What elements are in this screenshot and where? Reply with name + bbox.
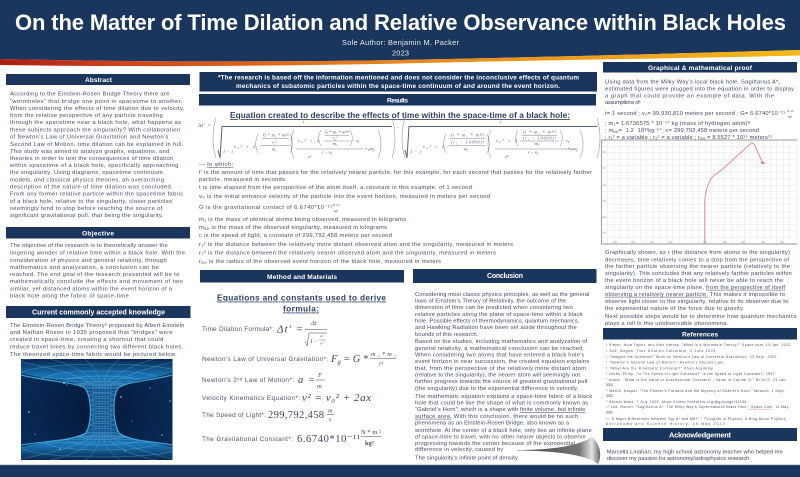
equation definitions [199, 162, 592, 265]
constant: speed of light: 299,792,458 [268, 410, 324, 421]
proof discussion: observe light closer to the singularity, relative to its observer due to [605, 299, 788, 305]
equation: time dilation: c² [320, 340, 324, 346]
main equation: (r₁ − 10000)² [523, 136, 557, 140]
equation: second law [202, 372, 325, 390]
equation definitions: is the mass of the observed singularity, measured in kilograms [210, 225, 387, 231]
equation: universal gravitation: F [331, 354, 337, 365]
abstract text: theories in order to test the consequences of time dilation [10, 156, 173, 162]
equation definitions: kg² [334, 209, 338, 213]
acknowledgement text: Marcella Linahan, my high school astronomy teacher who helped me [607, 450, 783, 456]
conclusion text: wormhole. At the center of a black hole, only lies an infinite plane [414, 428, 592, 434]
proof discussion: the farther particle observing the nearer particle (relatively to the [605, 264, 790, 270]
main equation: m₁ [535, 141, 540, 146]
equation: kinematics: Velocity Kinematics Equation*: [202, 395, 300, 402]
abstract text: description of the nature of time dilation was concluded. [10, 184, 173, 190]
author: Sole Author: Benjamin M. Packer [342, 38, 460, 47]
conclusion text: hole. Possible effects of thermodynamics, quantum mechanics, [415, 318, 580, 324]
conclusion text: laws of Einstein’s Theory of Relativity, the outcome of the [415, 298, 566, 304]
abstract text: of Newton’s Law of Universal Gravitation and Newton’s [10, 134, 168, 140]
conclusion text: The mathematic equation explains a space-time fabric of a black [415, 394, 592, 400]
proof introduction: estimated figures were plugged into the equation in order to display [605, 86, 794, 92]
assumptions [605, 109, 794, 141]
objective text [10, 243, 185, 300]
conclusion text: The singularity’s infinite point of density. [415, 456, 519, 462]
abstract text: This study was aimed to analyze graphs, equations, and [10, 149, 169, 155]
assumptions: = 8.5527 * 10¹⁶ meters¹¹ [705, 134, 772, 141]
abstract text: When considering the effects of time dilation due to velocity, [10, 106, 185, 112]
abstract text: through the spacetime near a black hole, what happens as [10, 120, 181, 126]
equation definitions: is the radius of the observed event horizon of the black hole, measured in meters [207, 259, 441, 265]
equation: time dilation: v² [320, 334, 324, 338]
equation: time dilation: Time Dilation Formula*: [202, 326, 274, 333]
conclusion text: event horizon in near succession, the created equation explains [415, 359, 589, 365]
constant: gravitational: kg² [365, 440, 374, 447]
abstract text: Second Law of Motion, time dilation can be explained in full. [10, 142, 184, 148]
proof discussion: Graphically shown, as r (the distance from atoms to the singularity) [605, 250, 790, 256]
panel: conclusion: Conclusion [487, 273, 523, 280]
reference list: 2022. [606, 410, 613, 414]
conclusion text: of space-time to travel, with no other nearer objects to observe [415, 434, 586, 440]
assumptions: kg² [788, 114, 792, 118]
constant: gravitational: 6.6740*10⁻¹¹ [297, 434, 360, 445]
abstract text: From any former relative particle within the spacetime fabric [10, 192, 183, 198]
proof discussion [605, 250, 797, 327]
objective text: reached. The end goal of the research presented will be to [10, 272, 179, 278]
abstract text: According to the Einstein-Rosen Bridge Theory there are [10, 92, 169, 98]
panel: objective [6, 227, 190, 300]
main equation: − v₀ [352, 138, 360, 143]
objective text: lingering wonder of relative time within a black hole. With the [10, 250, 185, 256]
equation definitions: G is the gravitational contact of 6.6740*10⁻¹¹ [199, 205, 332, 211]
conclusion text: (relative to the singularity), the nearer atom will seemingly not [415, 372, 580, 378]
reference list: ⁸ Martin, Kaspar. “The Painter’s Paradox and the Mystery of Gabriel’s Horn.” Medium, 1 Sept. [606, 389, 785, 393]
equation definitions: m₁ is the mass of identical atoms being observed, measured in kilograms [199, 217, 406, 223]
main equation: c² [308, 154, 312, 159]
main equation: * rᴮᴴ) [568, 147, 578, 152]
abstract text [9, 92, 185, 219]
main equation: c − v₀ [322, 150, 333, 154]
main equation: c² [505, 154, 509, 159]
equation: second law: m [317, 383, 322, 390]
main equation: v₀² + 2 [298, 138, 319, 143]
main equation: v₀² + 2 [234, 144, 255, 149]
equation definitions: N·m² [333, 203, 340, 207]
conclusion text [414, 292, 592, 462]
wormhole illustration [20, 359, 172, 460]
equation definitions: r₂² is the distance between the relatively nearer observed atom and the singularity, measured in meters [199, 250, 496, 256]
equation: universal gravitation [202, 351, 396, 368]
panel: references [603, 328, 797, 426]
panel: graphical and mathematical proof: Graphical & mathematical proof [648, 65, 753, 72]
conclusion text: When considering two atoms that have entered a black hole’s [415, 352, 584, 358]
proof discussion: Next possible steps would be to determine how quantum mechanics [605, 314, 797, 320]
constant: speed of light: The Speed of Light*: [202, 412, 266, 419]
conclusion text: (the singularity) due to the exponential difference in velocity. [415, 386, 579, 392]
main equation: m₁ [464, 146, 469, 152]
callout: research note: mechanics of subatomic particles within the space-time continuum of and around the event horizon. [236, 83, 560, 90]
equation definitions: BH [204, 227, 210, 231]
abstract text: significant gravitational pull, that being the singularity. [10, 213, 164, 219]
equation: time dilation: Δt [310, 320, 317, 327]
line chart [602, 140, 798, 244]
proof introduction: assumptions of: [605, 100, 641, 106]
equation: kinematics [202, 392, 371, 404]
equation definitions: t′ is the amount of time that passes for the relatively nearer particle, for this example, for each second that passes for the relatively farther [199, 170, 592, 176]
constant: gravitational: The Gravitational Constant*: [202, 436, 293, 443]
abstract text: of a black hole, relative to the singularity, closer particles [10, 199, 172, 205]
equations heading [217, 292, 386, 314]
main equation: m₁ [272, 146, 277, 152]
knowledge text: The Einstein-Rosen Bridge Theory² proposed by Albert Einstein [10, 323, 184, 329]
equation: universal gravitation: r² [379, 362, 383, 368]
conclusion text: Based on the studies, including mathematics and analyzation of [415, 339, 588, 345]
panel: current knowledge: Current commonly accepted knowledge [32, 310, 165, 316]
equation: time dilation [202, 320, 327, 346]
constant: gravitational [202, 429, 381, 447]
reference list: ² Sok, Bogna. Time Dilation Calculator, 2 June 2023. [606, 349, 717, 353]
main equation: v₀² + 2 [423, 144, 444, 149]
main equation: 1 − ( [410, 149, 422, 154]
equation definitions: particle, measured in seconds [199, 177, 285, 183]
conclusion text: progressing towards the center because of the exponential [415, 441, 575, 447]
main equation: t [500, 119, 502, 124]
equation: universal gravitation: Newton’s Law of Universal Gravitation*: [202, 356, 328, 363]
proof discussion: observing a relatively nearer particle. This makes it impossible to [605, 292, 785, 298]
conclusion text: dimension of time can be predicted when considering two [415, 305, 573, 311]
equation definitions: — In which: [199, 162, 233, 168]
objective text: mathematically conclude the effects and movement of two [10, 279, 183, 285]
reference list: ¹ Simon, Nola Taylor, and Alex Harvey. “What Is a Wormhole Theory?” Space.com, 13 Jan. 2022. [606, 343, 792, 347]
equation: time dilation: 1− [310, 339, 317, 345]
equation definitions: r [199, 259, 201, 265]
knowledge text: and Nathan Rosen in 1935 proposed that “bridges” were [10, 330, 173, 336]
main equation: − v₀ [562, 138, 570, 143]
year: 2023 [392, 48, 409, 58]
abstract text: seemingly tend to stop before reaching the source of [10, 206, 163, 212]
constant: gravitational: N*m² [361, 429, 381, 436]
equation: universal gravitation: m₁*m₂ [371, 351, 396, 358]
knowledge text: created in space-time, creating a shortcut that could [10, 337, 163, 343]
reference list: ¹⁰ Lea, Robert. “Sagittarius A*: The Milky Way’s Supermassive Black Hole.” Space.Com, 11 May [606, 405, 789, 409]
proof discussion: decreases, time relatively comes to a stop from the perspective of [605, 258, 789, 264]
panel: conclusion [413, 269, 600, 464]
panel: abstract [6, 74, 190, 219]
equation definitions: r₁² is the distance between the relatively more distant observed atom and the singularity, measured in meters [199, 242, 513, 248]
abstract text: these subjects approach the singularity? With collaboration [10, 128, 180, 134]
proof discussion: singularity on the space-time plane, from the perspective of itself [605, 285, 785, 291]
icon: Gabriel's horn [517, 437, 600, 464]
main equation: G * m₁ * mᴮᴴ [325, 130, 350, 134]
conclusion text: surface area. With this conclusion, there would be no such [415, 414, 578, 420]
conclusion text: bounds of this research. [415, 332, 479, 338]
panel: objective: Objective [82, 230, 114, 237]
abstract text: the singularity. Using diagrams, spacetime continuum [10, 170, 163, 176]
panel: graphical and mathematical proof [602, 62, 798, 327]
equation: second law: Newton’s 2ⁿᵈ Law of Motion*: [202, 377, 294, 384]
equations heading: Equations and constants used to derive [217, 292, 386, 302]
proof introduction: Using data from the Milky Way’s local black hole, Sagittarius A*, [605, 80, 780, 86]
abstract text: from the relative perspective of any particle traveling [10, 113, 163, 119]
panel: method and materials [200, 270, 404, 447]
main equation [197, 118, 600, 159]
equation definitions: v₀ is the initial entrance velocity of the particle into the event horizon, measured in meters per second [199, 194, 490, 200]
reference list: ⁶ Gibbs, Philip. “Is The Speed of Light Constant?” Is the Speed of Light Constant?, 1997. [606, 372, 776, 376]
equation definitions: t is time elapsed from the perspective of the atom itself, a constant in this example, of 1 second [199, 185, 472, 191]
knowledge text: The theorized space-time fabric would be pictured below. [10, 352, 177, 358]
equations heading: formula: [283, 304, 319, 314]
conclusion text: that, from the perspective of the relatively more distant atom [415, 366, 586, 372]
main equation: v₀² + 2 [496, 138, 517, 143]
constant: speed of light: m [328, 408, 333, 414]
acknowledgement text [607, 450, 783, 462]
assumptions: BH [613, 130, 619, 134]
main equation: G * m₁ * mᴮᴴ [523, 130, 556, 134]
callout: research note [200, 72, 597, 92]
abstract text: within spacetime of a black hole, specifically approaching [9, 163, 178, 169]
panel: results: Results [387, 98, 408, 104]
conclusion text: Considering most classic physics principles, as well as the general [415, 292, 589, 298]
conclusion text: general relativity, a mathematical conclusion can be reached. [415, 346, 585, 352]
acknowledgement text: discover my passion for astronomy/astrophysics research [607, 456, 749, 462]
proof introduction: a graph that could provide an example of data. With the [605, 94, 774, 100]
assumptions: t= 1 second ; v₀= 99,930,819 meters per second ; G= 6.6740*10⁻¹¹ [605, 111, 785, 117]
assumptions: ; m₁= 1.6735575 * 10⁻²⁷ kg (mass of hydrogen atom)⁸ [605, 120, 751, 127]
conclusion text: “Gabriel’s Horn”, which is a shape with finite volume, but infinite [415, 407, 585, 413]
constant: speed of light [202, 408, 334, 423]
reference list: ⁷ Admin. “What Is the Value of Gravitational Constant? - Value of Capital G.” BYJU’S, 23 Jan. [606, 378, 787, 382]
equation definitions: c is the speed of light, a constant of 299,792,458 meters per second [199, 233, 392, 239]
objective text: consideration of physics and general relativity, through [10, 258, 167, 264]
objective text: black hole along the fabric of space-time. [10, 294, 131, 300]
constant: speed of light: s [329, 417, 332, 423]
title: On the Matter of Time Dilation and Relative Observance within Black Holes [15, 10, 786, 35]
assumptions: N·m² [787, 109, 794, 113]
abstract text: “wormholes” that bridge one point in spacetime to another. [10, 99, 183, 105]
reference list: 2022. [606, 394, 613, 398]
equation heading: Equation created to describe the effects of time within the space-time of a black hole: [230, 110, 570, 120]
panel: method and materials: Method and Materials [267, 274, 337, 281]
equation: second law: a = [298, 375, 315, 386]
assumptions: = 1.2 10³²kg ⁹⁺; c= 299,792,458 meters per second [619, 127, 759, 134]
main equation: − [396, 126, 399, 131]
main equation: r₁² [272, 140, 277, 144]
equation definitions: m [199, 225, 204, 231]
conclusion text: difference in velocity, caused by [415, 447, 503, 453]
main equation: c − v₀ [528, 150, 539, 154]
callout: research note: *The research is based off the information mentioned and does not consider the inconclusive effects of quantum [218, 74, 579, 82]
conclusion text: and Hawking Radiation have been set aside throughout the [415, 325, 577, 331]
reference list: ⁹ Atomic Mass. 7 July 2023, https://chem.libretexts.org/@go/page/31195. [606, 400, 748, 404]
main equation: t [303, 119, 305, 124]
assumptions: ; r₁² = a variable ; r₂² = a variable ; r [605, 135, 700, 141]
main equation: Δt′ = [197, 124, 211, 129]
panel: acknowledgement [603, 428, 797, 462]
conclusion text: relative particles along the plane of space-time within a black [415, 312, 583, 318]
assumptions: BH [700, 137, 706, 141]
proof discussion: plays a roll in this unobservable phenomena. [605, 321, 729, 327]
main equation: 1 − ( [223, 149, 234, 154]
panel: abstract: Abstract [85, 77, 113, 84]
footer bar [0, 465, 800, 477]
reference list [606, 343, 792, 426]
proof introduction [605, 80, 794, 106]
knowledge text [10, 323, 184, 358]
main equation: r₁² [333, 136, 338, 140]
reference list: ³ “Imagine the Universe!” Work on Newton’s Law of Universal Gravitation, 23 Sept. 2020. [606, 355, 778, 359]
header banner [0, 0, 800, 66]
main equation: m₁ [333, 141, 338, 146]
panel: acknowledgement: Acknowledgement [669, 430, 732, 439]
main equation: G * m₁ * mᴮᴴ [451, 132, 484, 138]
reference list: ⁴ “Newton’s Second Law of Motion.” Newton’s Second Law. [606, 360, 724, 364]
main equation: (r₁ − 10000)² [451, 140, 485, 144]
equation: universal gravitation: g [337, 358, 341, 366]
main equation: G * m₁ * mᴮᴴ [263, 132, 290, 138]
reference list: ¹¹ “5 Major Differences between Sgr A* and M87*.” Thoughts of Physics: A Blog About Physics, [606, 417, 787, 421]
conclusion text: hole that could be like the shape of what is commonly known as [415, 400, 588, 406]
objective text: mathematics and analyzation, a conclusion can be [10, 265, 159, 271]
objective text: similar, yet distanced atoms within the event horizon of a [10, 286, 173, 292]
proof discussion: the exponential nature of the force due to gravity. [605, 306, 745, 312]
panel: references: References [682, 332, 718, 338]
conclusion text: phenomena as an Einstein-Rosen Bridge, also known as a [415, 420, 570, 426]
reference list: Astronomy and Science History, 19 May 2022. [606, 422, 727, 426]
reference list: ⁵ “What Are the Kinematic Formulas?” Khan Academy. [606, 366, 714, 370]
equation: time dilation: Δt′ = [276, 324, 303, 336]
reference list: 2023. [606, 383, 613, 387]
equation definitions: BH [201, 261, 207, 265]
main equation: * rᴮᴴ) [365, 147, 375, 152]
knowledge text: reduce travel times by connecting two different black holes. [10, 344, 184, 350]
assumptions: ; m [605, 128, 613, 134]
equation: kinematics: v² = v₀² + 2ax [302, 392, 371, 404]
panel: results [197, 94, 600, 265]
proof discussion: singularity). This concludes that any relatively farther particles within [605, 271, 792, 277]
equation: universal gravitation: = G * [341, 354, 369, 365]
panel: current knowledge [6, 306, 190, 460]
objective text: The objective of the research is to theoretically answer the [10, 243, 168, 249]
equation: second law: F [317, 372, 323, 379]
conclusion text: further progress towards the source of greatest gravitational pull [415, 379, 587, 385]
abstract text: models, and classical physics theories, an overarching [10, 178, 164, 184]
proof discussion: the event horizon of a black hole will never be able to reach the [605, 278, 783, 284]
